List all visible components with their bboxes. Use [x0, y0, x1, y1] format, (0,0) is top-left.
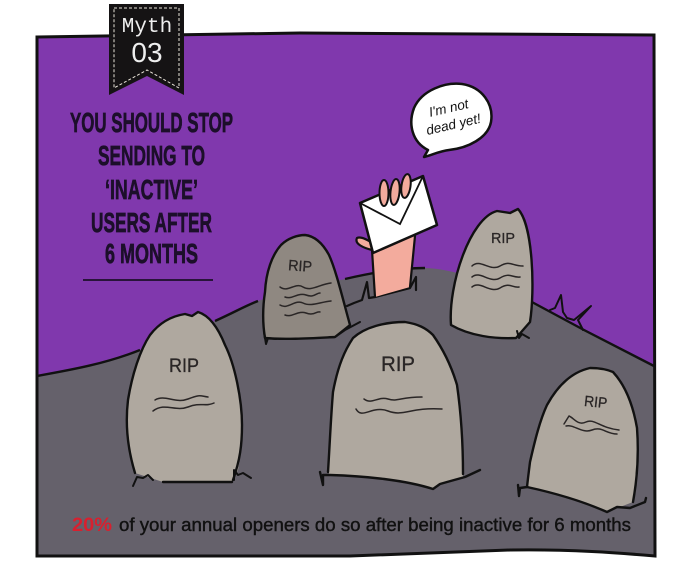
tombstone right: RIP — [583, 393, 608, 412]
tombstone left — [127, 312, 251, 486]
title: USERS AFTER — [91, 207, 212, 238]
tombstone centre: RIP — [381, 353, 415, 376]
tombstone top right: RIP — [491, 230, 515, 247]
grass right of hill — [550, 295, 591, 330]
tombstone centre — [320, 322, 480, 489]
tombstone right — [518, 368, 646, 512]
title: 6 MONTHS — [105, 238, 198, 269]
panel: purple sky — [37, 33, 655, 400]
tombstone top left: RIP — [288, 257, 313, 276]
badge number: 03: 03 — [131, 37, 163, 68]
tombstone left: RIP — [169, 356, 199, 377]
bubble text: dead yet! — [425, 111, 482, 138]
title underline — [83, 279, 213, 281]
title: SENDING TO — [98, 140, 205, 171]
myth badge — [109, 4, 184, 95]
fingers — [380, 180, 388, 206]
title — [70, 107, 233, 269]
lower hill line and grass — [347, 277, 416, 306]
tombstone top left — [263, 235, 360, 344]
arm edges — [356, 236, 415, 297]
badge label: Myth: Myth — [122, 16, 172, 39]
caption: of your annual openers do so after being inactive for 6 months — [119, 515, 631, 535]
envelope flap — [360, 176, 423, 224]
bubble text — [421, 94, 482, 138]
bubble text: I'm not — [427, 96, 471, 120]
title: YOU SHOULD STOP — [70, 107, 233, 138]
caption: 20% — [72, 515, 112, 536]
title: ‘INACTIVE’ — [105, 174, 198, 205]
arm — [356, 234, 415, 297]
speech bubble — [411, 84, 491, 157]
envelope — [360, 176, 437, 253]
tombstone top right — [451, 209, 532, 338]
panel: graveyard hill — [37, 268, 655, 556]
hand holding envelope — [347, 173, 437, 306]
hill outline — [37, 268, 654, 376]
